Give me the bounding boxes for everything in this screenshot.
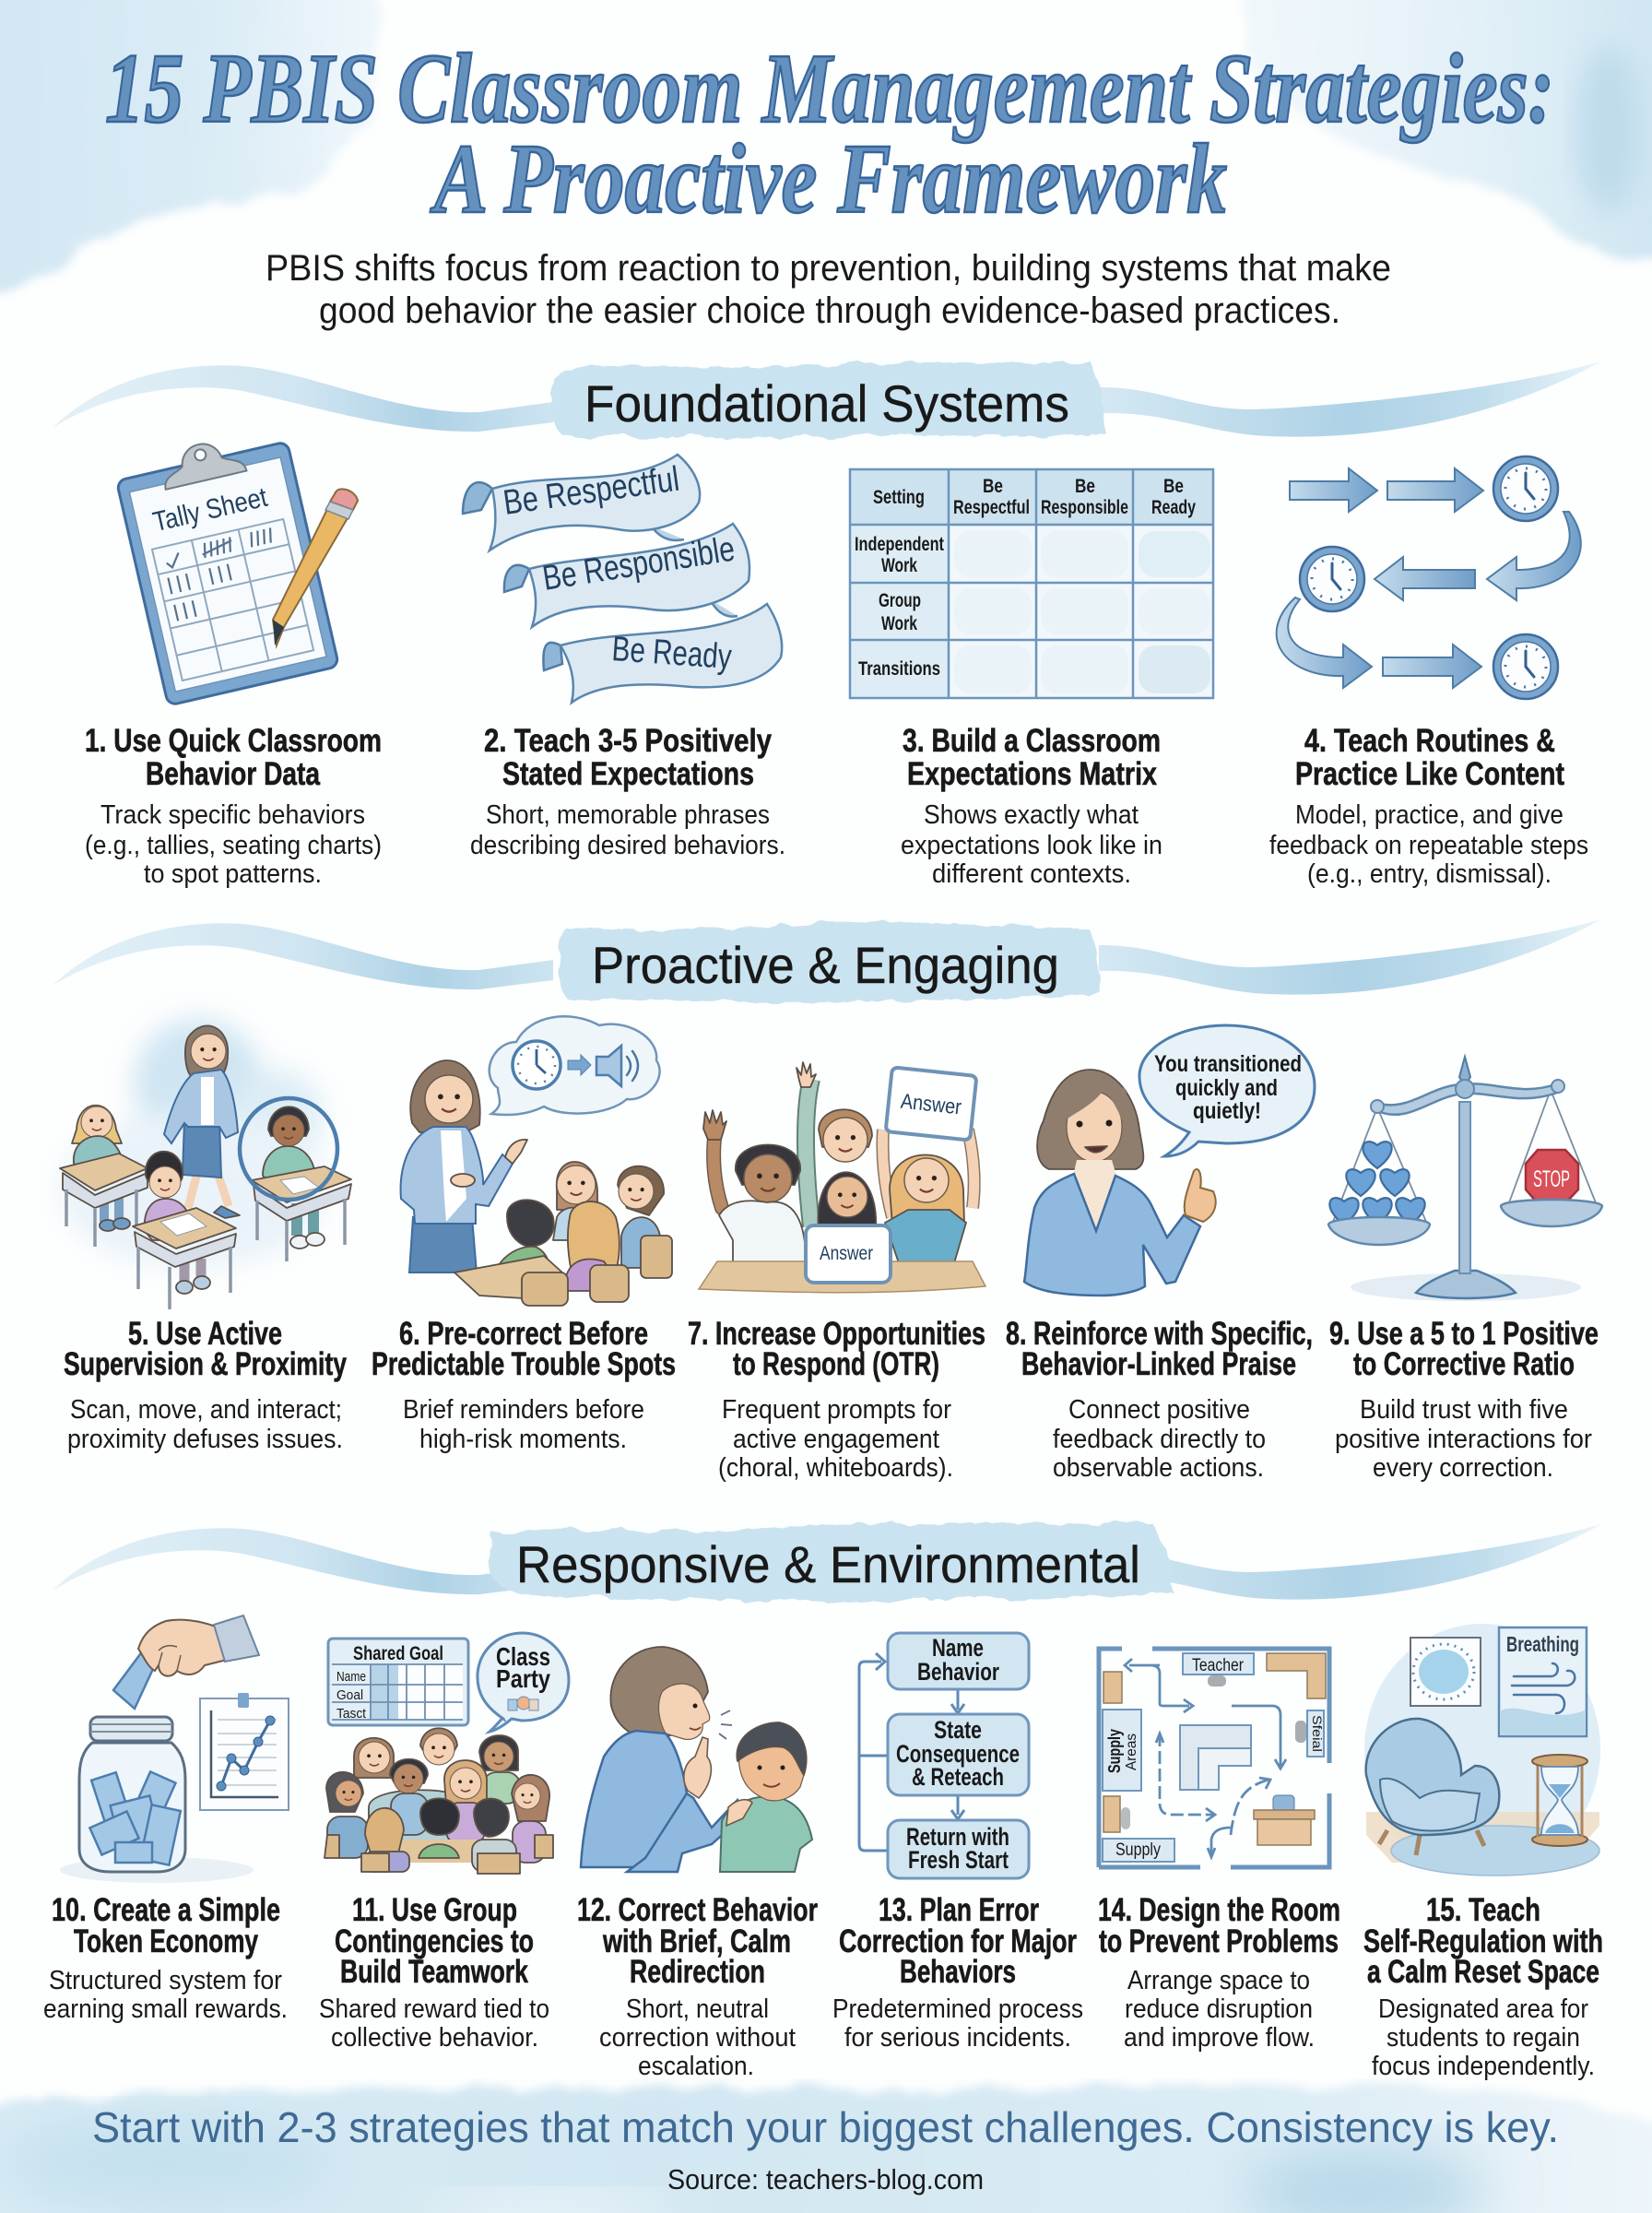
- subtitle: PBIS shifts focus from reaction to prevention, building systems that make: [266, 248, 1391, 289]
- panel: strategy 7: [688, 1062, 985, 1483]
- heading: strategy 2: Stated Expectations: [502, 756, 754, 792]
- description: strategy 8: feedback directly to: [1053, 1425, 1266, 1454]
- panel: strategy 12: [577, 1647, 818, 2081]
- heading: strategy 6: Predictable Trouble Spots: [372, 1346, 676, 1382]
- description: strategy 11: Shared reward tied to: [319, 1994, 549, 2024]
- icon: expectations matrix: Independent: [855, 534, 944, 555]
- heading: strategy 3: [903, 723, 1161, 792]
- description: strategy 14: [1124, 1966, 1315, 2053]
- description: strategy 15: Designated area for: [1378, 1994, 1588, 2024]
- panel: strategy 6: [372, 1016, 676, 1454]
- icon: teacher with praise speech bubble: quickly and: [1175, 1075, 1278, 1101]
- source line: Source: teachers-blog.com: [667, 2163, 984, 2195]
- description: strategy 5: [67, 1395, 343, 1454]
- icon: expectations matrix: Respectful: [953, 497, 1030, 518]
- heading: strategy 11: [335, 1892, 534, 1990]
- description: strategy 10: earning small rewards.: [43, 1994, 288, 2024]
- description: strategy 7: [718, 1395, 953, 1483]
- description: strategy 10: [43, 1966, 288, 2024]
- description: strategy 15: focus independently.: [1372, 2052, 1595, 2081]
- heading: strategy 1: 1. Use Quick Classroom: [85, 723, 382, 759]
- panel: strategy 10: [43, 1615, 289, 2024]
- icon: error correction flowchart: [859, 1633, 1029, 1878]
- description: strategy 4: Model, practice, and give: [1295, 800, 1564, 830]
- heading: strategy 9: [1329, 1316, 1599, 1382]
- icon: students responding: [699, 1062, 985, 1293]
- heading: strategy 1: [85, 723, 382, 792]
- icon: expectation banners: [463, 455, 782, 703]
- icon: expectations matrix: Group: [879, 590, 921, 611]
- watercolor wash: top right: [1245, 0, 1652, 263]
- description: strategy 1: (e.g., tallies, seating charts): [85, 831, 382, 860]
- icon: expectations matrix: Setting: [873, 487, 925, 508]
- icon: shared goal chart and class party: Tasct: [336, 1706, 367, 1722]
- heading: strategy 12: Redirection: [630, 1954, 765, 1990]
- description: strategy 12: [599, 1994, 796, 2081]
- panel: strategy 2: [463, 455, 785, 860]
- icon: shared goal chart and class party: Shared Goal: [353, 1643, 443, 1664]
- heading: strategy 7: to Respond (OTR): [733, 1346, 939, 1382]
- icon: expectation banners: Be Ready: [610, 630, 733, 677]
- title: [105, 34, 1554, 234]
- icon: shared goal chart and class party: Class: [496, 1642, 550, 1671]
- icon: students responding: Answer: [820, 1243, 873, 1264]
- description: strategy 1: [85, 800, 382, 889]
- heading: strategy 12: [577, 1892, 818, 1990]
- description: strategy 7: active engagement: [733, 1425, 939, 1454]
- heading: strategy 10: Token Economy: [74, 1923, 258, 1959]
- description: strategy 9: [1335, 1395, 1592, 1483]
- icon: classroom floor plan: Sfeial: [1310, 1715, 1325, 1752]
- heading: strategy 11: 11. Use Group: [352, 1892, 517, 1928]
- icon: classroom floor plan: Areas: [1124, 1734, 1139, 1770]
- heading: strategy 5: [64, 1316, 347, 1382]
- heading: strategy 2: 2. Teach 3-5 Positively: [484, 723, 772, 759]
- heading: strategy 4: [1295, 723, 1564, 792]
- icon: expectation banners: Be Responsible: [540, 530, 738, 598]
- icon: classroom floor plan: Teacher: [1192, 1656, 1245, 1675]
- description: strategy 15: [1372, 1994, 1595, 2081]
- description: strategy 9: Build trust with five: [1360, 1395, 1568, 1425]
- icon: expectations matrix: Responsible: [1041, 497, 1128, 518]
- heading: strategy 6: 6. Pre-correct Before: [399, 1316, 648, 1352]
- icon: routine arrows and clocks: [1277, 456, 1581, 699]
- description: strategy 11: collective behavior.: [331, 2023, 538, 2053]
- icon: error correction flowchart: Return with: [906, 1823, 1009, 1851]
- icon: expectations matrix: Be: [1075, 476, 1095, 497]
- heading: strategy 7: [688, 1316, 985, 1382]
- description: strategy 12: escalation.: [638, 2052, 754, 2081]
- watercolor wash: top left: [0, 0, 379, 300]
- icon: expectations matrix: Work: [881, 613, 917, 634]
- heading: strategy 15: 15. Teach: [1426, 1892, 1540, 1928]
- icon: shared goal chart and class party: Party: [496, 1664, 550, 1693]
- heading: strategy 8: Behavior-Linked Praise: [1021, 1346, 1296, 1382]
- heading: strategy 3: Expectations Matrix: [907, 756, 1157, 792]
- title: A Proactive Framework: [430, 124, 1227, 234]
- section banner: Proactive & Engaging: Proactive & Engaging: [592, 936, 1059, 994]
- icon: shared goal chart and class party: Name: [336, 1669, 366, 1685]
- heading: strategy 15: [1363, 1892, 1603, 1990]
- heading: strategy 5: Supervision & Proximity: [64, 1346, 347, 1382]
- description: strategy 12: Short, neutral: [626, 1994, 769, 2024]
- icon: error correction flowchart: Fresh Start: [908, 1846, 1009, 1874]
- section banner: Foundational Systems: Foundational Systems: [584, 374, 1069, 432]
- heading: strategy 14: [1098, 1892, 1340, 1959]
- heading: strategy 9: to Corrective Ratio: [1353, 1346, 1575, 1382]
- heading: strategy 13: Behaviors: [900, 1954, 1016, 1990]
- description: strategy 4: [1269, 800, 1588, 889]
- description: strategy 2: [470, 800, 785, 860]
- panel: strategy 11: [319, 1633, 569, 2053]
- description: strategy 5: Scan, move, and interact;: [70, 1395, 342, 1425]
- section banner: Responsive & Environmental: Responsive & Environmental: [516, 1535, 1140, 1593]
- icon: clipboard tally sheet: [112, 425, 358, 705]
- icon: error correction flowchart: Name: [932, 1634, 984, 1662]
- description: strategy 6: Brief reminders before: [403, 1395, 644, 1425]
- panel: strategy 5: [60, 1019, 351, 1454]
- heading: strategy 10: [52, 1892, 280, 1959]
- icon: balance scale with hearts and stop sign: [1328, 1057, 1602, 1301]
- panel: strategy 15: [1363, 1624, 1603, 2081]
- icon: error correction flowchart: Consequence: [896, 1740, 1020, 1768]
- icon: students responding: Answer: [900, 1089, 962, 1118]
- icon: calm reset space: [1364, 1624, 1600, 1876]
- heading: strategy 5: 5. Use Active: [128, 1316, 282, 1352]
- description: strategy 13: Predetermined process: [832, 1994, 1083, 2024]
- icon: error correction flowchart: Behavior: [917, 1658, 999, 1686]
- heading: strategy 8: 8. Reinforce with Specific,: [1006, 1316, 1313, 1352]
- footer callout: Start with 2-3 strategies that match your biggest challenges. Consistency is key.: [92, 2103, 1559, 2151]
- icon: shared goal chart and class party: [324, 1633, 569, 1874]
- description: strategy 14: Arrange space to: [1127, 1966, 1310, 1995]
- description: strategy 3: expectations look like in: [901, 831, 1162, 860]
- heading: strategy 3: 3. Build a Classroom: [903, 723, 1161, 759]
- description: strategy 8: [1053, 1395, 1266, 1483]
- description: strategy 3: different contexts.: [932, 859, 1131, 889]
- description: strategy 4: (e.g., entry, dismissal).: [1307, 859, 1552, 889]
- description: strategy 11: [319, 1994, 549, 2053]
- description: strategy 6: [403, 1395, 644, 1454]
- icon: classroom floor plan: Supply: [1115, 1840, 1161, 1860]
- icon: token jar and progress chart: [60, 1615, 289, 1883]
- description: strategy 12: correction without: [599, 2023, 796, 2053]
- description: strategy 4: feedback on repeatable steps: [1269, 831, 1588, 860]
- description: strategy 1: Track specific behaviors: [100, 800, 365, 830]
- heading: strategy 14: 14. Design the Room: [1098, 1892, 1340, 1928]
- panel: strategy 3: [850, 469, 1213, 889]
- icon: teacher with praise speech bubble: quietly!: [1193, 1098, 1261, 1124]
- description: strategy 15: students to regain: [1386, 2023, 1580, 2053]
- heading: strategy 11: Build Teamwork: [340, 1954, 528, 1990]
- heading: strategy 4: 4. Teach Routines &: [1304, 723, 1555, 759]
- icon: expectations matrix: [850, 469, 1213, 698]
- description: strategy 7: (choral, whiteboards).: [718, 1453, 953, 1483]
- icon: calm reset space: Breathing: [1506, 1632, 1579, 1656]
- panel: strategy 9: [1328, 1057, 1602, 1483]
- section banner: Proactive & Engaging: [53, 919, 1601, 1003]
- description: strategy 14: and improve flow.: [1124, 2023, 1315, 2053]
- icon: clipboard tally sheet: Tally Sheet: [150, 482, 271, 538]
- description: strategy 2: describing desired behaviors.: [470, 831, 785, 860]
- icon: expectations matrix: Transitions: [858, 658, 940, 680]
- heading: strategy 8: [1006, 1316, 1313, 1382]
- icon: classroom floor plan: Supply: [1105, 1729, 1124, 1773]
- description: strategy 13: for serious incidents.: [844, 2023, 1071, 2053]
- heading: strategy 1: Behavior Data: [146, 756, 320, 792]
- icon: balance scale with hearts and stop sign: STOP: [1533, 1166, 1570, 1192]
- icon: error correction flowchart: & Reteach: [912, 1763, 1004, 1791]
- heading: strategy 13: [839, 1892, 1077, 1990]
- heading: strategy 14: to Prevent Problems: [1099, 1923, 1339, 1959]
- description: strategy 9: every correction.: [1373, 1453, 1553, 1483]
- heading: strategy 13: Correction for Major: [839, 1923, 1077, 1959]
- description: strategy 13: [832, 1994, 1083, 2053]
- description: strategy 2: Short, memorable phrases: [486, 800, 770, 830]
- panel: strategy 1: [85, 425, 382, 889]
- icon: teacher giving pre-correction: [401, 1016, 672, 1306]
- description: strategy 9: positive interactions for: [1335, 1425, 1592, 1454]
- icon: expectation banners: Be Respectful: [501, 460, 681, 523]
- description: strategy 3: Shows exactly what: [924, 800, 1139, 830]
- subtitle: [266, 248, 1391, 331]
- description: strategy 3: [901, 800, 1162, 889]
- description: strategy 7: Frequent prompts for: [722, 1395, 951, 1425]
- icon: teacher with praise speech bubble: You transitioned: [1154, 1051, 1302, 1077]
- icon: expectations matrix: Be: [983, 476, 1003, 497]
- description: strategy 6: high-risk moments.: [419, 1425, 627, 1454]
- heading: strategy 11: Contingencies to: [335, 1923, 534, 1959]
- heading: strategy 6: [372, 1316, 676, 1382]
- icon: expectations matrix: Ready: [1151, 497, 1196, 518]
- icon: teacher with praise speech bubble: [1024, 1025, 1315, 1296]
- icon: teacher calmly redirecting student: [581, 1647, 812, 1872]
- heading: strategy 12: 12. Correct Behavior: [577, 1892, 818, 1928]
- description: strategy 10: Structured system for: [49, 1966, 282, 1995]
- panel: strategy 14: [1098, 1649, 1340, 2053]
- heading: strategy 12: with Brief, Calm: [602, 1923, 791, 1959]
- panel: strategy 13: [832, 1633, 1083, 2053]
- panel: strategy 4: [1269, 456, 1588, 889]
- watercolor wash: footer: [0, 2086, 1652, 2213]
- subtitle: good behavior the easier choice through evidence-based practices.: [319, 290, 1340, 331]
- heading: strategy 13: 13. Plan Error: [879, 1892, 1039, 1928]
- icon: expectations matrix: Work: [881, 555, 917, 576]
- heading: strategy 10: 10. Create a Simple: [52, 1892, 280, 1928]
- description: strategy 8: observable actions.: [1053, 1453, 1264, 1483]
- description: strategy 14: reduce disruption: [1125, 1994, 1313, 2024]
- icon: classroom floor plan: [1099, 1649, 1329, 1867]
- icon: shared goal chart and class party: Goal: [336, 1687, 363, 1703]
- icon: active supervision classroom: [60, 1019, 351, 1309]
- section banner: Responsive & Environmental: [53, 1523, 1601, 1603]
- description: strategy 5: proximity defuses issues.: [67, 1425, 343, 1454]
- heading: strategy 7: 7. Increase Opportunities: [688, 1316, 985, 1352]
- heading: strategy 4: Practice Like Content: [1295, 756, 1564, 792]
- panel: strategy 8: [1006, 1025, 1315, 1483]
- icon: expectations matrix: Be: [1163, 476, 1184, 497]
- section banner: Foundational Systems: [53, 361, 1601, 438]
- heading: strategy 2: [484, 723, 772, 792]
- icon: error correction flowchart: State: [934, 1716, 982, 1744]
- description: strategy 1: to spot patterns.: [144, 859, 322, 889]
- description: strategy 8: Connect positive: [1068, 1395, 1250, 1425]
